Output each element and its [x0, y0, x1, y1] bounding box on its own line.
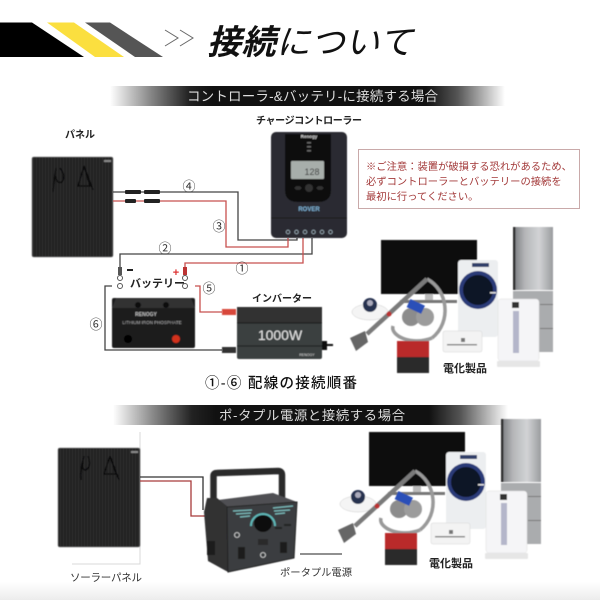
washer	[446, 452, 486, 529]
callout line	[300, 553, 342, 555]
wire 4 black	[113, 192, 297, 240]
number labels: ①	[235, 261, 249, 276]
number labels: ③	[212, 219, 226, 234]
banner: controller and battery: コントローラ-&バッテリ-に接続する場合	[187, 88, 438, 104]
label: appliances 1: 電化製品	[443, 361, 487, 375]
solar panel 1	[32, 157, 113, 257]
microwave	[397, 341, 429, 373]
number labels: ④	[182, 179, 196, 194]
television	[369, 432, 465, 495]
vacuum cleaner	[338, 471, 433, 543]
label: charge controller: チャージコントローラー	[256, 115, 362, 127]
label: appliances 2: 電化製品	[429, 556, 473, 570]
legend: wiring order: ①-⑥ 配線の接続順番	[205, 374, 358, 392]
terminals and polarity marks: +	[173, 267, 179, 279]
number labels: ⑥	[89, 317, 103, 332]
caution notice: ※ご注意：装置が破損する恐れがあるため、	[366, 160, 572, 173]
appliances group 2	[338, 419, 541, 565]
air purifier	[485, 491, 528, 559]
battery: RENOGY	[135, 312, 157, 318]
number labels: ⑤	[202, 281, 216, 296]
refrigerator	[513, 227, 553, 352]
label: battery: バッテリー	[130, 277, 185, 290]
inverter: RENOGY	[299, 353, 315, 357]
number labels	[89, 179, 249, 332]
battery: LITHIUM IRON PHOSPHATE	[122, 320, 182, 325]
number labels: ②	[158, 241, 172, 256]
caution notice: 必ずコントローラーとバッテリーの接続を	[366, 175, 562, 188]
label: portable power: ポータプル電源	[280, 566, 352, 579]
double arrow mark	[165, 30, 193, 46]
air purifier	[497, 299, 540, 367]
solar panel 2	[58, 448, 140, 547]
header chevrons	[0, 22, 163, 57]
wire 1 red	[185, 238, 303, 270]
banner: portable power	[113, 405, 508, 425]
terminals and polarity marks	[118, 267, 188, 288]
wire 6 black	[105, 286, 222, 350]
appliances group 1	[350, 227, 553, 373]
portable power station	[204, 471, 297, 572]
dimension guide lines	[72, 432, 140, 564]
inverter: 1000W	[258, 327, 303, 343]
television	[381, 240, 477, 303]
charge controller: ROVER	[298, 207, 320, 213]
wires to portable power	[140, 477, 205, 516]
caution notice: 最初に行ってください。	[366, 190, 478, 203]
bottom shading	[0, 582, 600, 600]
battery	[112, 298, 195, 348]
printer	[431, 523, 470, 544]
wire 5 red	[195, 286, 222, 312]
label: solar panel: ソーラーパネル	[70, 572, 142, 584]
printer	[443, 331, 482, 352]
banner: portable power: ポ-タプル電源と接続する場合	[219, 407, 405, 423]
vacuum cleaner	[350, 279, 445, 351]
title: 接続について	[207, 24, 416, 62]
refrigerator	[501, 419, 541, 544]
wire 3 red	[113, 201, 288, 247]
caution notice	[358, 150, 580, 208]
wire 2 black	[120, 238, 312, 270]
charge controller: 128	[304, 167, 320, 177]
label: panel: パネル	[65, 129, 95, 141]
banner: controller and battery	[110, 86, 505, 106]
label: inverter: インバーター	[252, 293, 312, 305]
washer	[458, 260, 498, 337]
inverter	[222, 307, 333, 359]
charge controller	[271, 132, 347, 238]
wiring diagram	[105, 192, 312, 350]
microwave	[385, 533, 417, 565]
robot cleaner	[352, 298, 388, 320]
MC4 connectors	[125, 190, 160, 203]
robot cleaner	[340, 490, 376, 512]
charge controller: Renogy	[301, 134, 318, 139]
